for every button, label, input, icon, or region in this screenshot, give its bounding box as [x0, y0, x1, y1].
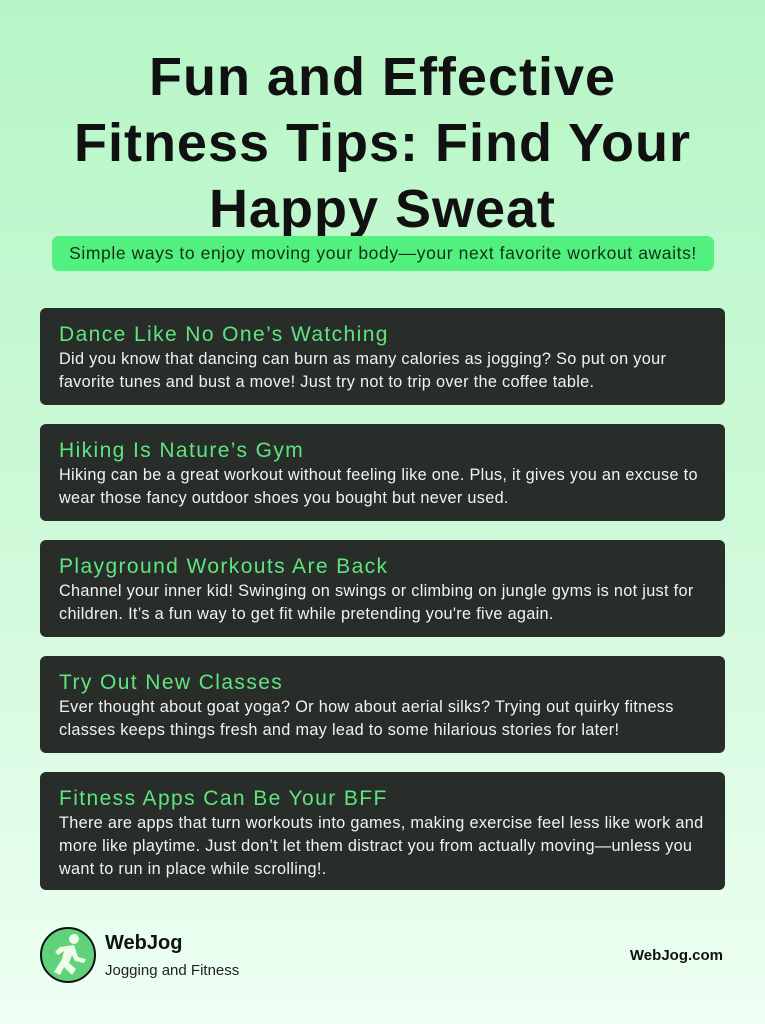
panel: classes: Try Out New Classes [59, 671, 283, 694]
panel: apps: more like playtime. Just don’t let them distract you from actually moving—unless you [59, 837, 692, 855]
title: Happy Sweat [209, 179, 556, 239]
panel: dance: Dance Like No One’s Watching [59, 323, 389, 346]
panel: apps: There are apps that turn workouts into games, making exercise feel less like work and [59, 814, 703, 832]
panel: classes: Ever thought about goat yoga? Or how about aerial silks? Trying out quirky fitness [59, 698, 674, 716]
title: Fun and Effective [149, 47, 616, 107]
panel: hiking: Hiking can be a great workout without feeling like one. Plus, it gives you an excuse to [59, 466, 698, 484]
panel: apps [40, 772, 725, 890]
panel: hiking [40, 424, 725, 521]
panel: playground [40, 540, 725, 637]
panel: apps: want to run in place while scrolling!. [59, 860, 327, 878]
title: Fitness Tips: Find Your [74, 113, 691, 173]
icon: logo runner [40, 927, 96, 983]
panel: dance: Did you know that dancing can burn as many calories as jogging? So put on your [59, 350, 666, 368]
tagline: Jogging and Fitness [105, 962, 239, 979]
url: WebJog.com [630, 947, 723, 964]
panel: apps: Fitness Apps Can Be Your BFF [59, 787, 388, 810]
brand name: WebJog [105, 932, 182, 954]
subtitle badge [52, 236, 714, 271]
panel: classes [40, 656, 725, 753]
panel: dance: favorite tunes and bust a move! Just try not to trip over the coffee table. [59, 373, 594, 391]
title [74, 47, 691, 239]
subtitle badge: Simple ways to enjoy moving your body—your next favorite workout awaits! [69, 243, 697, 263]
panel: hiking: wear those fancy outdoor shoes you bought but never used. [59, 489, 509, 507]
panel: playground: children. It’s a fun way to get fit while pretending you're five again. [59, 605, 554, 623]
panel: dance [40, 308, 725, 405]
panel: hiking: Hiking Is Nature’s Gym [59, 439, 304, 462]
panel: playground: Playground Workouts Are Back [59, 555, 388, 578]
panel: classes: classes keeps things fresh and may lead to some hilarious stories for later! [59, 721, 619, 739]
panel: playground: Channel your inner kid! Swinging on swings or climbing on jungle gyms is not just for [59, 582, 694, 600]
